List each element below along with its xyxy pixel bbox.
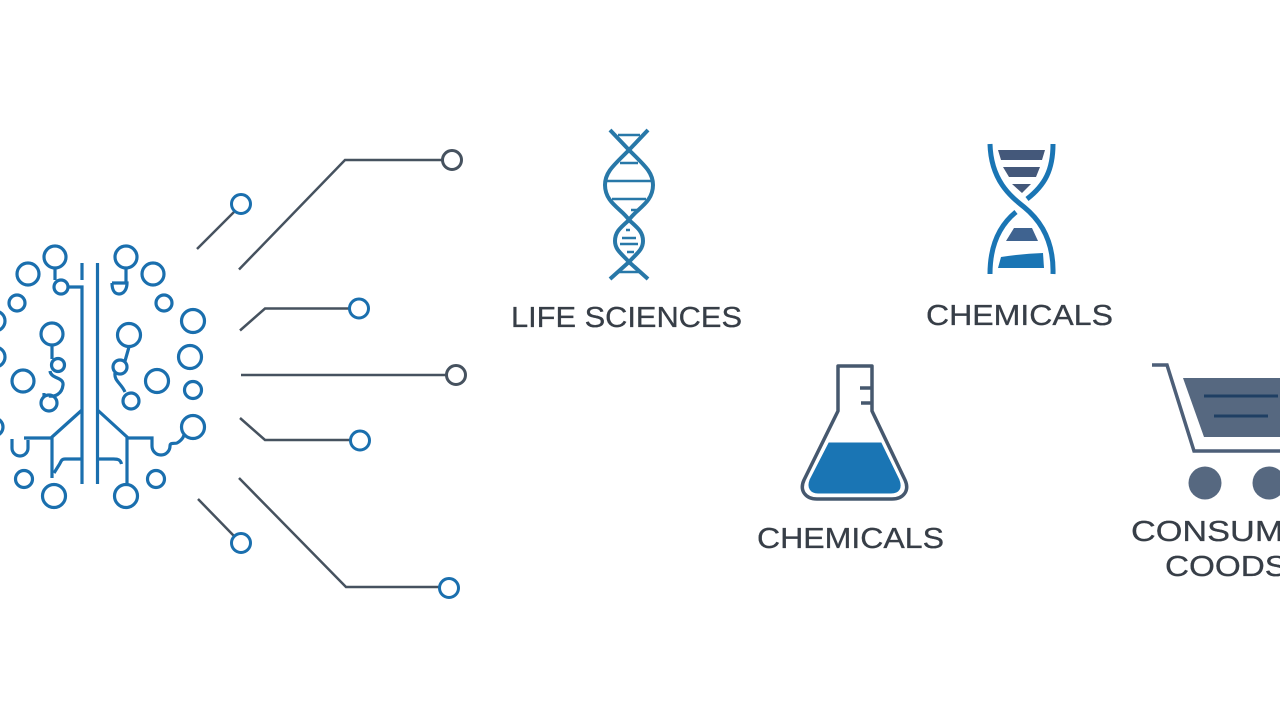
- connector: upper short: [197, 194, 250, 249]
- connector: upper middle: [240, 299, 368, 330]
- icon: flask: [802, 366, 907, 499]
- connector: lower middle: [240, 418, 370, 450]
- label: consumer goods: COODS: [1165, 551, 1280, 583]
- icon: DNA helix, life sciences: [605, 130, 653, 279]
- icon: DNA helix, chemicals: [990, 144, 1053, 274]
- icon: circuit brain: [0, 246, 204, 508]
- connector: center: [241, 366, 466, 384]
- label: chemicals upper: CHEMICALS: [926, 300, 1113, 332]
- label: consumer goods: [1131, 516, 1280, 583]
- connector: bottom long: [239, 478, 458, 598]
- connector: top long: [239, 150, 462, 270]
- connector: lower short: [198, 499, 250, 552]
- icon: shopping cart: [1152, 365, 1280, 500]
- label: chemicals lower: CHEMICALS: [757, 523, 944, 555]
- label: life sciences: LIFE SCIENCES: [511, 302, 742, 334]
